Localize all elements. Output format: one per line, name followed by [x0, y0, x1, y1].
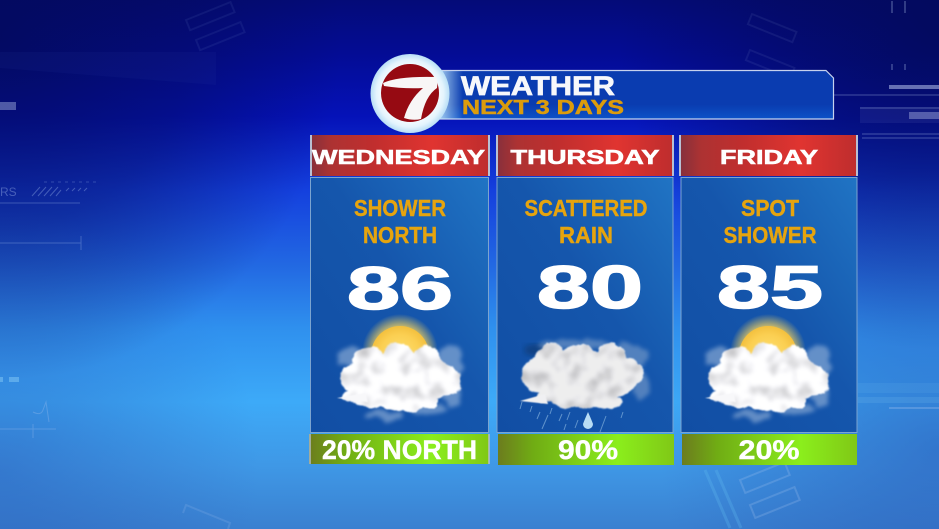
day header: friday	[680, 135, 858, 176]
day header: wednesday	[310, 135, 490, 176]
day header: wednesday: WEDNESDAY	[312, 146, 485, 169]
condition text: shower north	[354, 195, 446, 248]
icon: rain cloud	[520, 339, 650, 432]
icon: station logo 7	[370, 54, 450, 133]
day header: friday: FRIDAY	[720, 146, 818, 169]
background tech decoration: left	[0, 2, 245, 529]
condition text: scattered rain: RAIN	[559, 222, 613, 248]
background tech decoration: right	[705, 1, 939, 528]
icon: sun behind cloud	[336, 314, 464, 420]
title bar	[435, 70, 834, 119]
precipitation bar: 20%: 20%	[738, 435, 800, 465]
condition text: spot shower: SPOT	[741, 195, 799, 221]
precipitation bar: 20%	[682, 434, 857, 465]
panel: thursday	[496, 135, 674, 465]
day header: thursday	[496, 135, 674, 176]
condition text: shower north: NORTH	[363, 222, 437, 248]
temperature: 80: 80	[537, 254, 643, 321]
precipitation bar: 90%: 90%	[558, 435, 618, 465]
condition text: scattered rain	[524, 195, 648, 248]
rain streaks	[520, 402, 623, 432]
forecast card: thursday	[497, 178, 673, 432]
condition text: shower north: SHOWER	[354, 195, 446, 221]
raindrop	[583, 412, 593, 429]
precipitation bar: 90%	[498, 434, 674, 465]
heading: weather: WEATHER	[461, 71, 615, 101]
forecast card: wednesday	[310, 178, 488, 432]
temperature: 86: 86	[347, 255, 453, 322]
icon: sun behind cloud	[704, 314, 832, 420]
day header: thursday: THURSDAY	[510, 146, 660, 169]
condition text: spot shower	[724, 195, 817, 248]
condition text: spot shower: SHOWER	[724, 222, 817, 248]
background: RS	[0, 185, 17, 199]
temperature: 85: 85	[717, 254, 823, 321]
panel: friday	[680, 135, 858, 465]
condition text: scattered rain: SCATTERED	[524, 195, 648, 221]
precipitation bar: 20% north: 20% NORTH	[322, 435, 477, 465]
forecast card: friday	[681, 178, 857, 432]
panel: wednesday	[309, 135, 490, 465]
subheading: next 3 days: NEXT 3 DAYS	[462, 97, 624, 119]
